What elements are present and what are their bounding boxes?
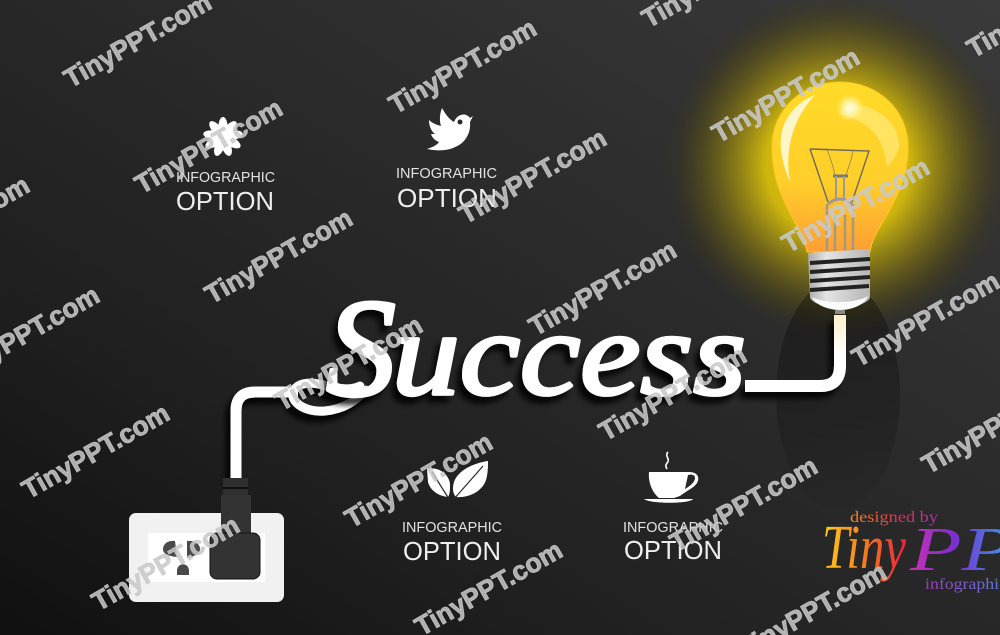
watermarks: TinyPPT.com [130, 93, 288, 200]
heading: Success: uccess [392, 287, 746, 420]
icon: flower [203, 117, 243, 157]
heading: Success: S [326, 271, 396, 426]
watermarks: TinyPPT.com [594, 340, 752, 447]
panel: wall socket [129, 478, 284, 602]
option: leaves [402, 461, 502, 566]
watermarks: TinyPPT.com [777, 152, 935, 259]
watermarks: TinyPPT.com [524, 235, 682, 342]
watermarks: TinyPPT.com [454, 123, 612, 230]
watermarks: TinyPPT.com [17, 398, 175, 505]
logo: designed by TinyPPT: infographic [925, 576, 1000, 593]
icon: leaves [427, 461, 488, 499]
glass highlights [781, 94, 899, 182]
watermarks: TinyPPT.com [384, 13, 542, 120]
option: flower [176, 117, 275, 216]
bulb cast shadow [776, 280, 900, 510]
bulb glow [666, 0, 1000, 337]
watermarks: TinyPPT.com [665, 451, 823, 558]
bulb glass [772, 82, 908, 252]
plug [210, 478, 260, 579]
logo: designed by TinyPPT [822, 509, 1000, 593]
icon: coffee cup [644, 452, 698, 503]
label: OPTION [176, 186, 274, 216]
watermarks: TinyPPT.com [87, 510, 245, 617]
icon: light bulb [772, 82, 908, 314]
label: OPTION [397, 183, 497, 213]
label: INFOGRAPHIC [176, 169, 275, 186]
filament [810, 148, 869, 251]
logo: designed by TinyPPT: designed by [850, 509, 938, 526]
logo: designed by TinyPPT: Tiny [822, 514, 906, 582]
option: bird [396, 108, 497, 213]
watermarks: TinyPPT.com [340, 427, 498, 534]
socket holes [163, 541, 200, 575]
watermarks: TinyPPT.com [270, 310, 428, 417]
option: coffee cup [623, 452, 723, 565]
label: INFOGRAPHIC [396, 165, 497, 182]
icon: bird [427, 108, 473, 150]
label: INFOGRAPHIC [402, 519, 502, 536]
watermarks: TinyPPT.com [847, 266, 1000, 373]
watermarks: TinyPPT.com [200, 203, 358, 310]
label: INFOGRAPHIC [623, 519, 723, 536]
cable from socket to bulb [236, 315, 840, 480]
label: OPTION [624, 535, 722, 565]
screw base [808, 249, 870, 314]
heading: Success [326, 271, 746, 426]
label: OPTION [403, 536, 501, 566]
watermarks: TinyPPT.com [707, 42, 865, 149]
